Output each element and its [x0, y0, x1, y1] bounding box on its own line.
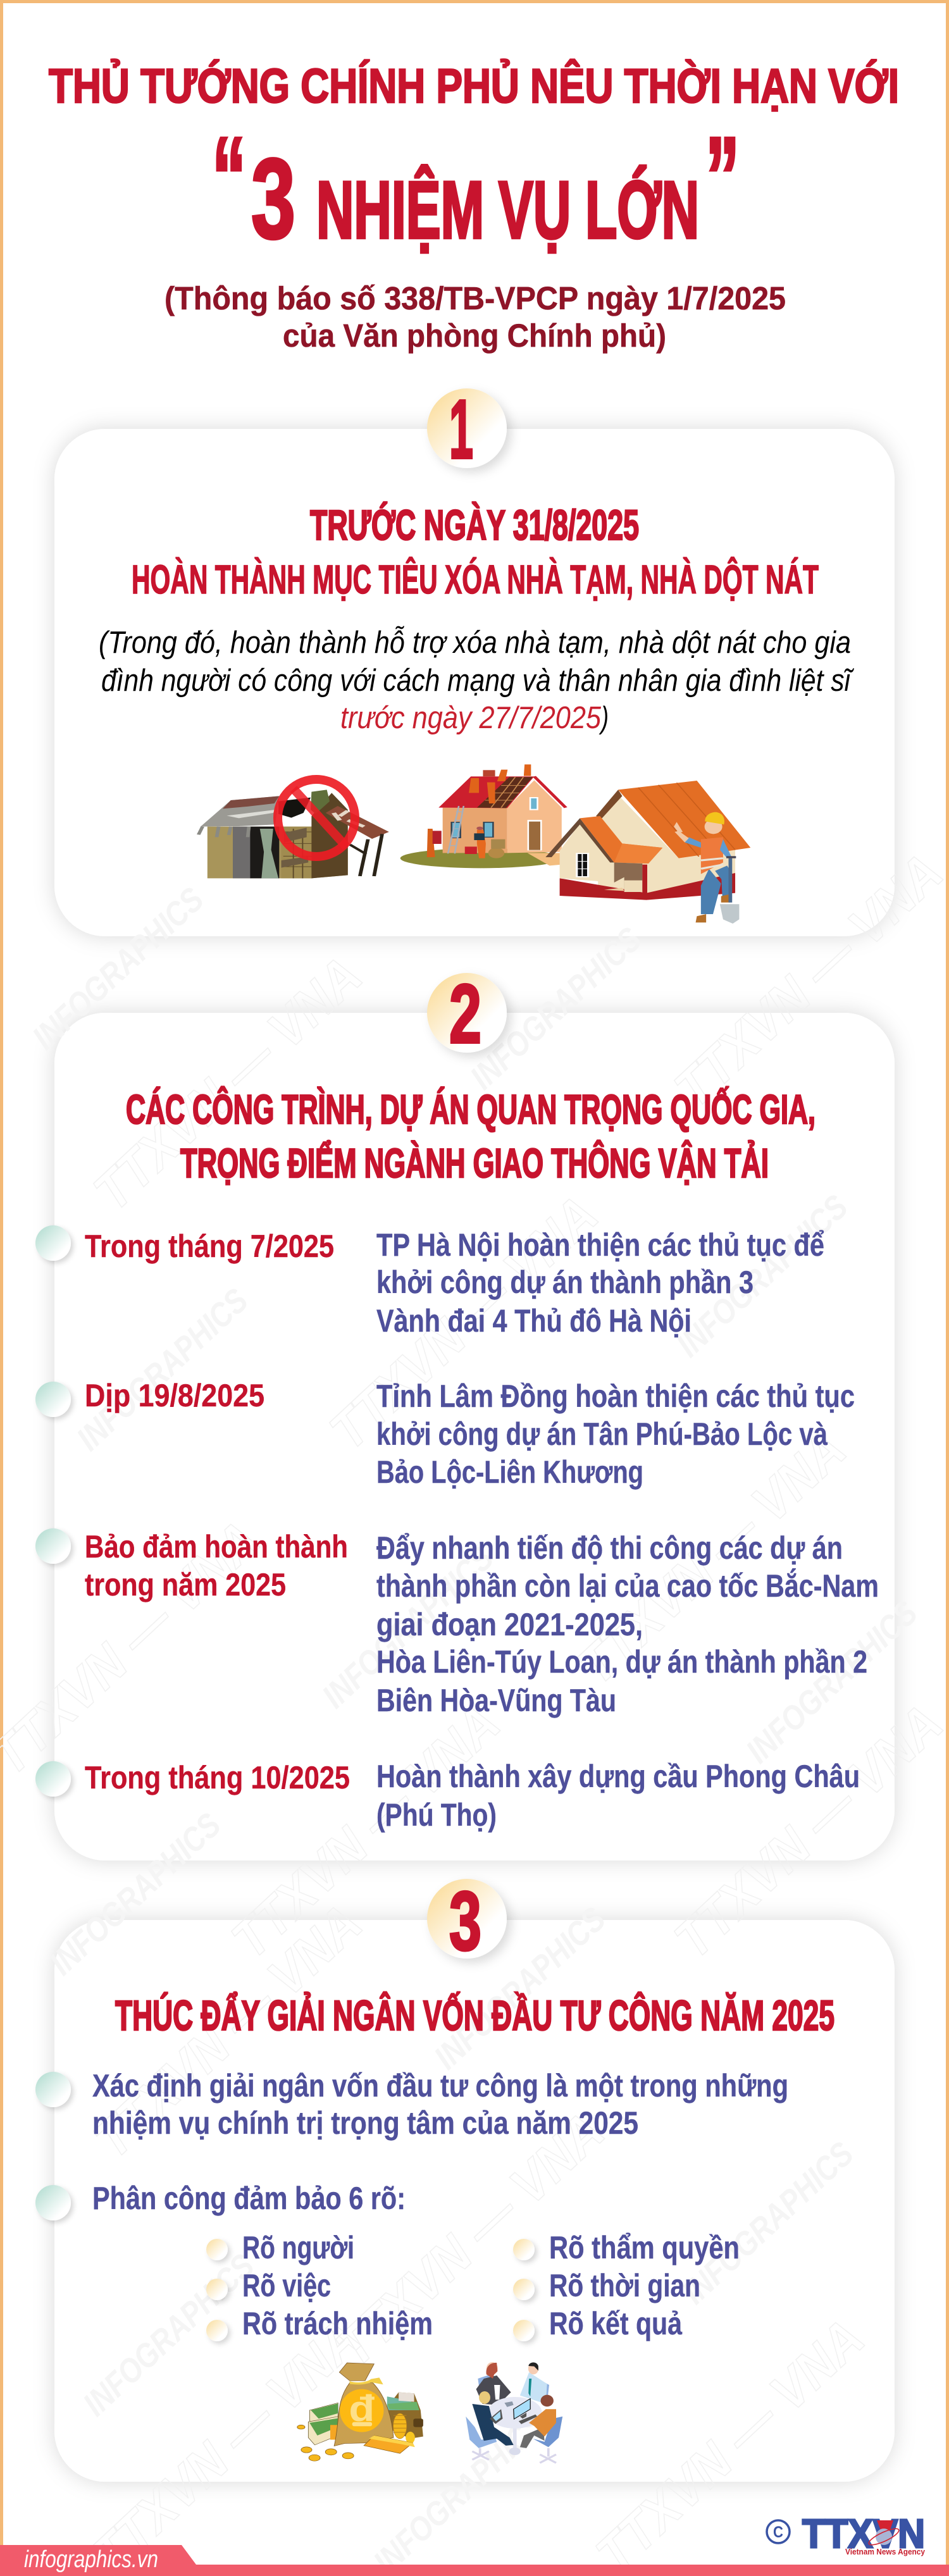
icon: team meeting: [466, 2362, 562, 2463]
text: TTXVN — VNA: [220, 1693, 511, 1969]
timeline row: within 2025: trong năm 2025: [85, 1567, 286, 1602]
subtitle: của Văn phòng Chính phủ): [283, 318, 666, 354]
text: INFOGRAPHICS: [427, 1900, 613, 2077]
logo: TTXVN Vietnam News Agency: C: [773, 2523, 783, 2541]
icon: money bag: [297, 2363, 423, 2461]
number badge 3: 3: [449, 1874, 481, 1967]
text: INFOGRAPHICS: [315, 1539, 501, 1716]
number badge 1: 1: [449, 383, 473, 476]
text: TTXVN — VNA: [566, 1419, 857, 1695]
timeline row: 19 August 2025: khởi công dự án Tân Phú-Bảo Lộc và: [376, 1416, 828, 1452]
timeline row: October 2025: Hoàn thành xây dựng cầu Phong Châu: [376, 1759, 860, 1794]
icon: house under repair: [400, 764, 566, 868]
timeline row: 19 August 2025: Bảo Lộc-Liên Khương: [376, 1454, 643, 1490]
text: INFOGRAPHICS: [366, 2405, 552, 2576]
list: six clear items: [206, 2230, 740, 2341]
text: INFOGRAPHICS: [42, 1806, 228, 1983]
icon: money bag: đ: [349, 2387, 375, 2429]
title: [49, 59, 899, 263]
text block: task 1 note: [99, 626, 854, 735]
title: ”: [705, 114, 740, 241]
timeline row: July 2025: TP Hà Nội hoàn thiện các thủ tục để: [376, 1227, 824, 1263]
subtitle: (Thông báo số 338/TB-VPCP ngày 1/7/2025: [164, 280, 786, 316]
timeline row: July 2025: [35, 1225, 824, 1339]
text: INFOGRAPHICS: [675, 2135, 861, 2312]
icon: shack crossed out: [199, 779, 389, 878]
timeline row: within 2025: Biên Hòa-Vũng Tàu: [376, 1683, 616, 1718]
heading: task 1: TRƯỚC NGÀY 31/8/2025: [310, 502, 639, 549]
title: NHIỆM VỤ LỚN: [316, 165, 699, 256]
timeline row: within 2025: Bảo đảm hoàn thành: [85, 1529, 348, 1564]
bullet: disbursement priority: nhiệm vụ chính trị trọng tâm của năm 2025: [92, 2105, 638, 2141]
logo: TTXVN Vietnam News Agency: Vietnam News Agency: [845, 2547, 926, 2556]
timeline row: 19 August 2025: [35, 1378, 855, 1490]
heading: task 1: [132, 502, 819, 602]
source url: infographics.vn: [24, 2546, 158, 2573]
timeline row: July 2025: Vành đai 4 Thủ đô Hà Nội: [376, 1303, 692, 1339]
text block: task 1 note: đình người có công với cách mạng và thân nhân gia đình liệt sĩ: [101, 664, 854, 698]
bullet: disbursement priority: Xác định giải ngân vốn đầu tư công là một trong những: [92, 2068, 788, 2103]
text: INFOGRAPHICS: [70, 1282, 256, 1458]
heading: task 2: [126, 1086, 816, 1186]
footer ribbon: [0, 2545, 949, 2576]
icon: new house with worker: [545, 781, 750, 924]
text: TTXVN — VNA: [325, 2101, 615, 2377]
timeline row: October 2025: (Phú Thọ): [376, 1797, 497, 1833]
timeline row: 19 August 2025: Tỉnh Lâm Đồng hoàn thiện các thủ tục: [376, 1378, 855, 1414]
panel: task 2 card: [54, 1013, 895, 1861]
logo: TTXVN Vietnam News Agency: TTXVN: [802, 2511, 925, 2556]
text: INFOGRAPHICS: [25, 881, 211, 1057]
text: TTXVN — VNA: [81, 2308, 371, 2576]
number badge 2: [427, 967, 507, 1060]
text block: task 1 note: trước ngày 27/7/2025: [340, 701, 602, 735]
timeline row: October 2025: Trong tháng 10/2025: [85, 1760, 350, 1795]
bullet: six clear assignments: [35, 2181, 406, 2220]
text: TTXVN — VNA: [82, 945, 373, 1222]
text: TTXVN — VNA: [318, 1184, 609, 1461]
text: TTXVN — VNA: [585, 2308, 875, 2576]
text: INFOGRAPHICS: [463, 920, 649, 1097]
text: TTXVN — VNA: [82, 1893, 373, 2169]
timeline row: within 2025: giai đoạn 2021-2025,: [376, 1607, 643, 1642]
number badge 1: [427, 383, 507, 476]
text: INFOGRAPHICS: [669, 1188, 855, 1365]
list: six clear items: Rõ việc: [242, 2268, 331, 2303]
list: six clear items: Rõ thẩm quyền: [549, 2230, 740, 2265]
timeline row: July 2025: Trong tháng 7/2025: [85, 1229, 334, 1264]
timeline row: October 2025: [35, 1759, 860, 1833]
number badge 3: [427, 1874, 507, 1967]
panel: task 3 card: [54, 1920, 895, 2482]
bullet: disbursement priority: [35, 2068, 788, 2141]
text: INFOGRAPHICS: [76, 2247, 262, 2424]
number badge 2: 2: [449, 967, 481, 1060]
timeline row: within 2025: [35, 1528, 879, 1718]
list: six clear items: Rõ thời gian: [549, 2268, 700, 2303]
list: six clear items: Rõ người: [242, 2230, 354, 2265]
title: “: [212, 114, 246, 241]
text block: task 1 note: ): [599, 701, 609, 735]
timeline row: within 2025: Đẩy nhanh tiến độ thi công các dự án: [376, 1530, 843, 1566]
title: 3: [251, 135, 295, 263]
list: six clear items: Rõ trách nhiệm: [242, 2306, 433, 2341]
bullet: six clear assignments: Phân công đảm bảo 6 rõ:: [92, 2181, 406, 2216]
text block: task 1 note: (Trong đó, hoàn thành hỗ trợ xóa nhà tạm, nhà dột nát cho gia: [99, 626, 851, 660]
list: six clear items: Rõ kết quả: [549, 2306, 683, 2341]
timeline row: July 2025: khởi công dự án thành phần 3: [376, 1265, 754, 1300]
panel: task 1 card: [54, 429, 895, 936]
subtitle: [164, 280, 786, 354]
timeline row: 19 August 2025: Dịp 19/8/2025: [85, 1378, 264, 1413]
